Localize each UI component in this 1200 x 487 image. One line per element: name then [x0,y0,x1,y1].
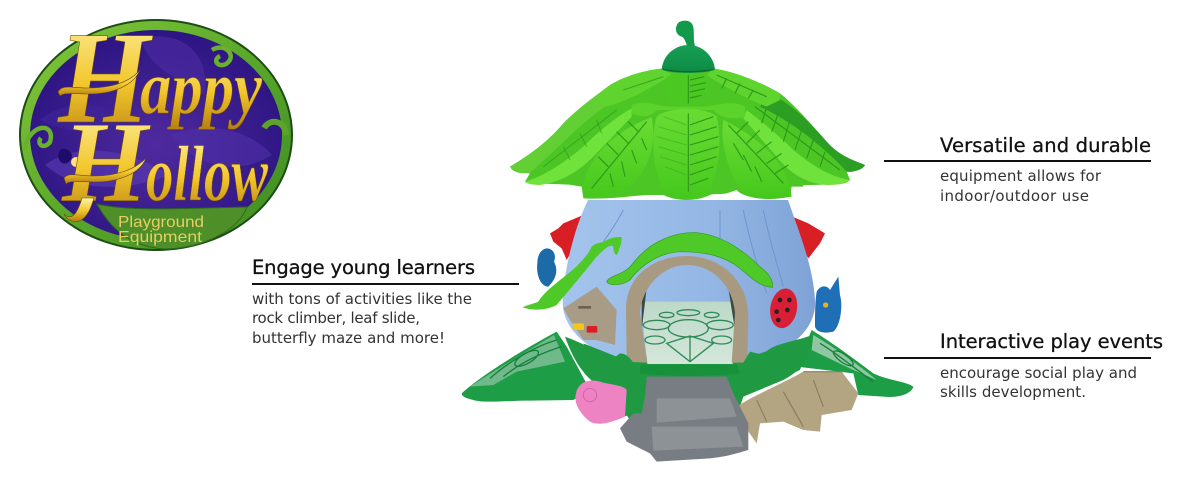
logo wordmark: Hollow: ollow [146,130,269,217]
leaf veins [543,75,840,192]
callout: Engage young learners: with tons of activities like the [252,290,472,308]
roof collar [632,103,745,118]
red flower: right [788,215,825,258]
logo leaf badge [97,204,247,249]
base platform: right [797,330,913,397]
roof outer strips [525,108,850,185]
red flower: left [550,215,583,260]
base platform: left [462,332,590,402]
floor leaf pattern [643,310,733,362]
blue bird [537,248,556,287]
floor band [640,364,740,376]
logo wordmark: Hollow [61,99,269,227]
front leaves: left [565,337,643,417]
butterfly [815,277,841,333]
callout: Versatile and durable [884,134,1151,205]
callout: Engage young learners: Engage young learners [252,256,475,279]
logo wordmark: Happy: H [57,4,154,151]
body grooves [587,210,783,293]
walkway [732,372,858,443]
callout: Interactive play events: Interactive play events [940,330,1163,353]
playhouse illustration [462,21,913,462]
logo wordmark: Happy [57,4,262,151]
door floor [641,302,735,364]
callout: Interactive play events: skills development. [940,383,1086,401]
rock steps [620,377,748,462]
callout: Versatile and durable: Versatile and durable [940,134,1151,157]
callout: Engage young learners: rock climber, leaf slide, [252,309,420,327]
roof upper leaves [597,68,780,107]
roof front leaf: centre [653,109,719,199]
callout: Interactive play events [884,330,1163,401]
front leaves: right [737,335,812,397]
rock shading [652,398,743,451]
callout: Interactive play events: encourage social play and [940,364,1137,382]
vine slide [523,237,622,310]
logo wordmark: Happy: appy [140,46,262,130]
logo: Happy Hollow [19,4,293,251]
house lower part [462,200,913,462]
pink snail [575,380,627,424]
roof back leaf: left light [510,95,610,173]
roof back leaf: right shade [760,93,865,172]
door pillars shade [642,288,735,330]
roof [510,21,865,200]
logo leaf badge: Equipment [118,229,203,246]
door leaf canopy [607,233,773,287]
roof dome [662,45,715,73]
callout: Versatile and durable: indoor/outdoor use [940,187,1089,205]
logo wordmark: Hollow: H [61,99,152,227]
roof silhouette [510,68,865,200]
house body [563,200,815,358]
roof front leaf: left [583,117,653,197]
roof upper leaf: centre [666,73,708,105]
door arch [626,256,748,363]
dome rim [662,69,714,72]
logo leaf badge: Playground [118,214,204,231]
birdhouse [563,287,617,345]
callout: Engage young learners [252,256,519,347]
ladybug [767,286,800,330]
callout: Versatile and durable: equipment allows for [940,167,1102,185]
callout: Engage young learners: butterfly maze and more! [252,329,445,347]
roof front leaf: right [722,120,792,198]
walkway planks [757,372,843,427]
green base behind steps [583,337,812,420]
logo oval frame [19,19,293,251]
dome stem [676,21,695,46]
